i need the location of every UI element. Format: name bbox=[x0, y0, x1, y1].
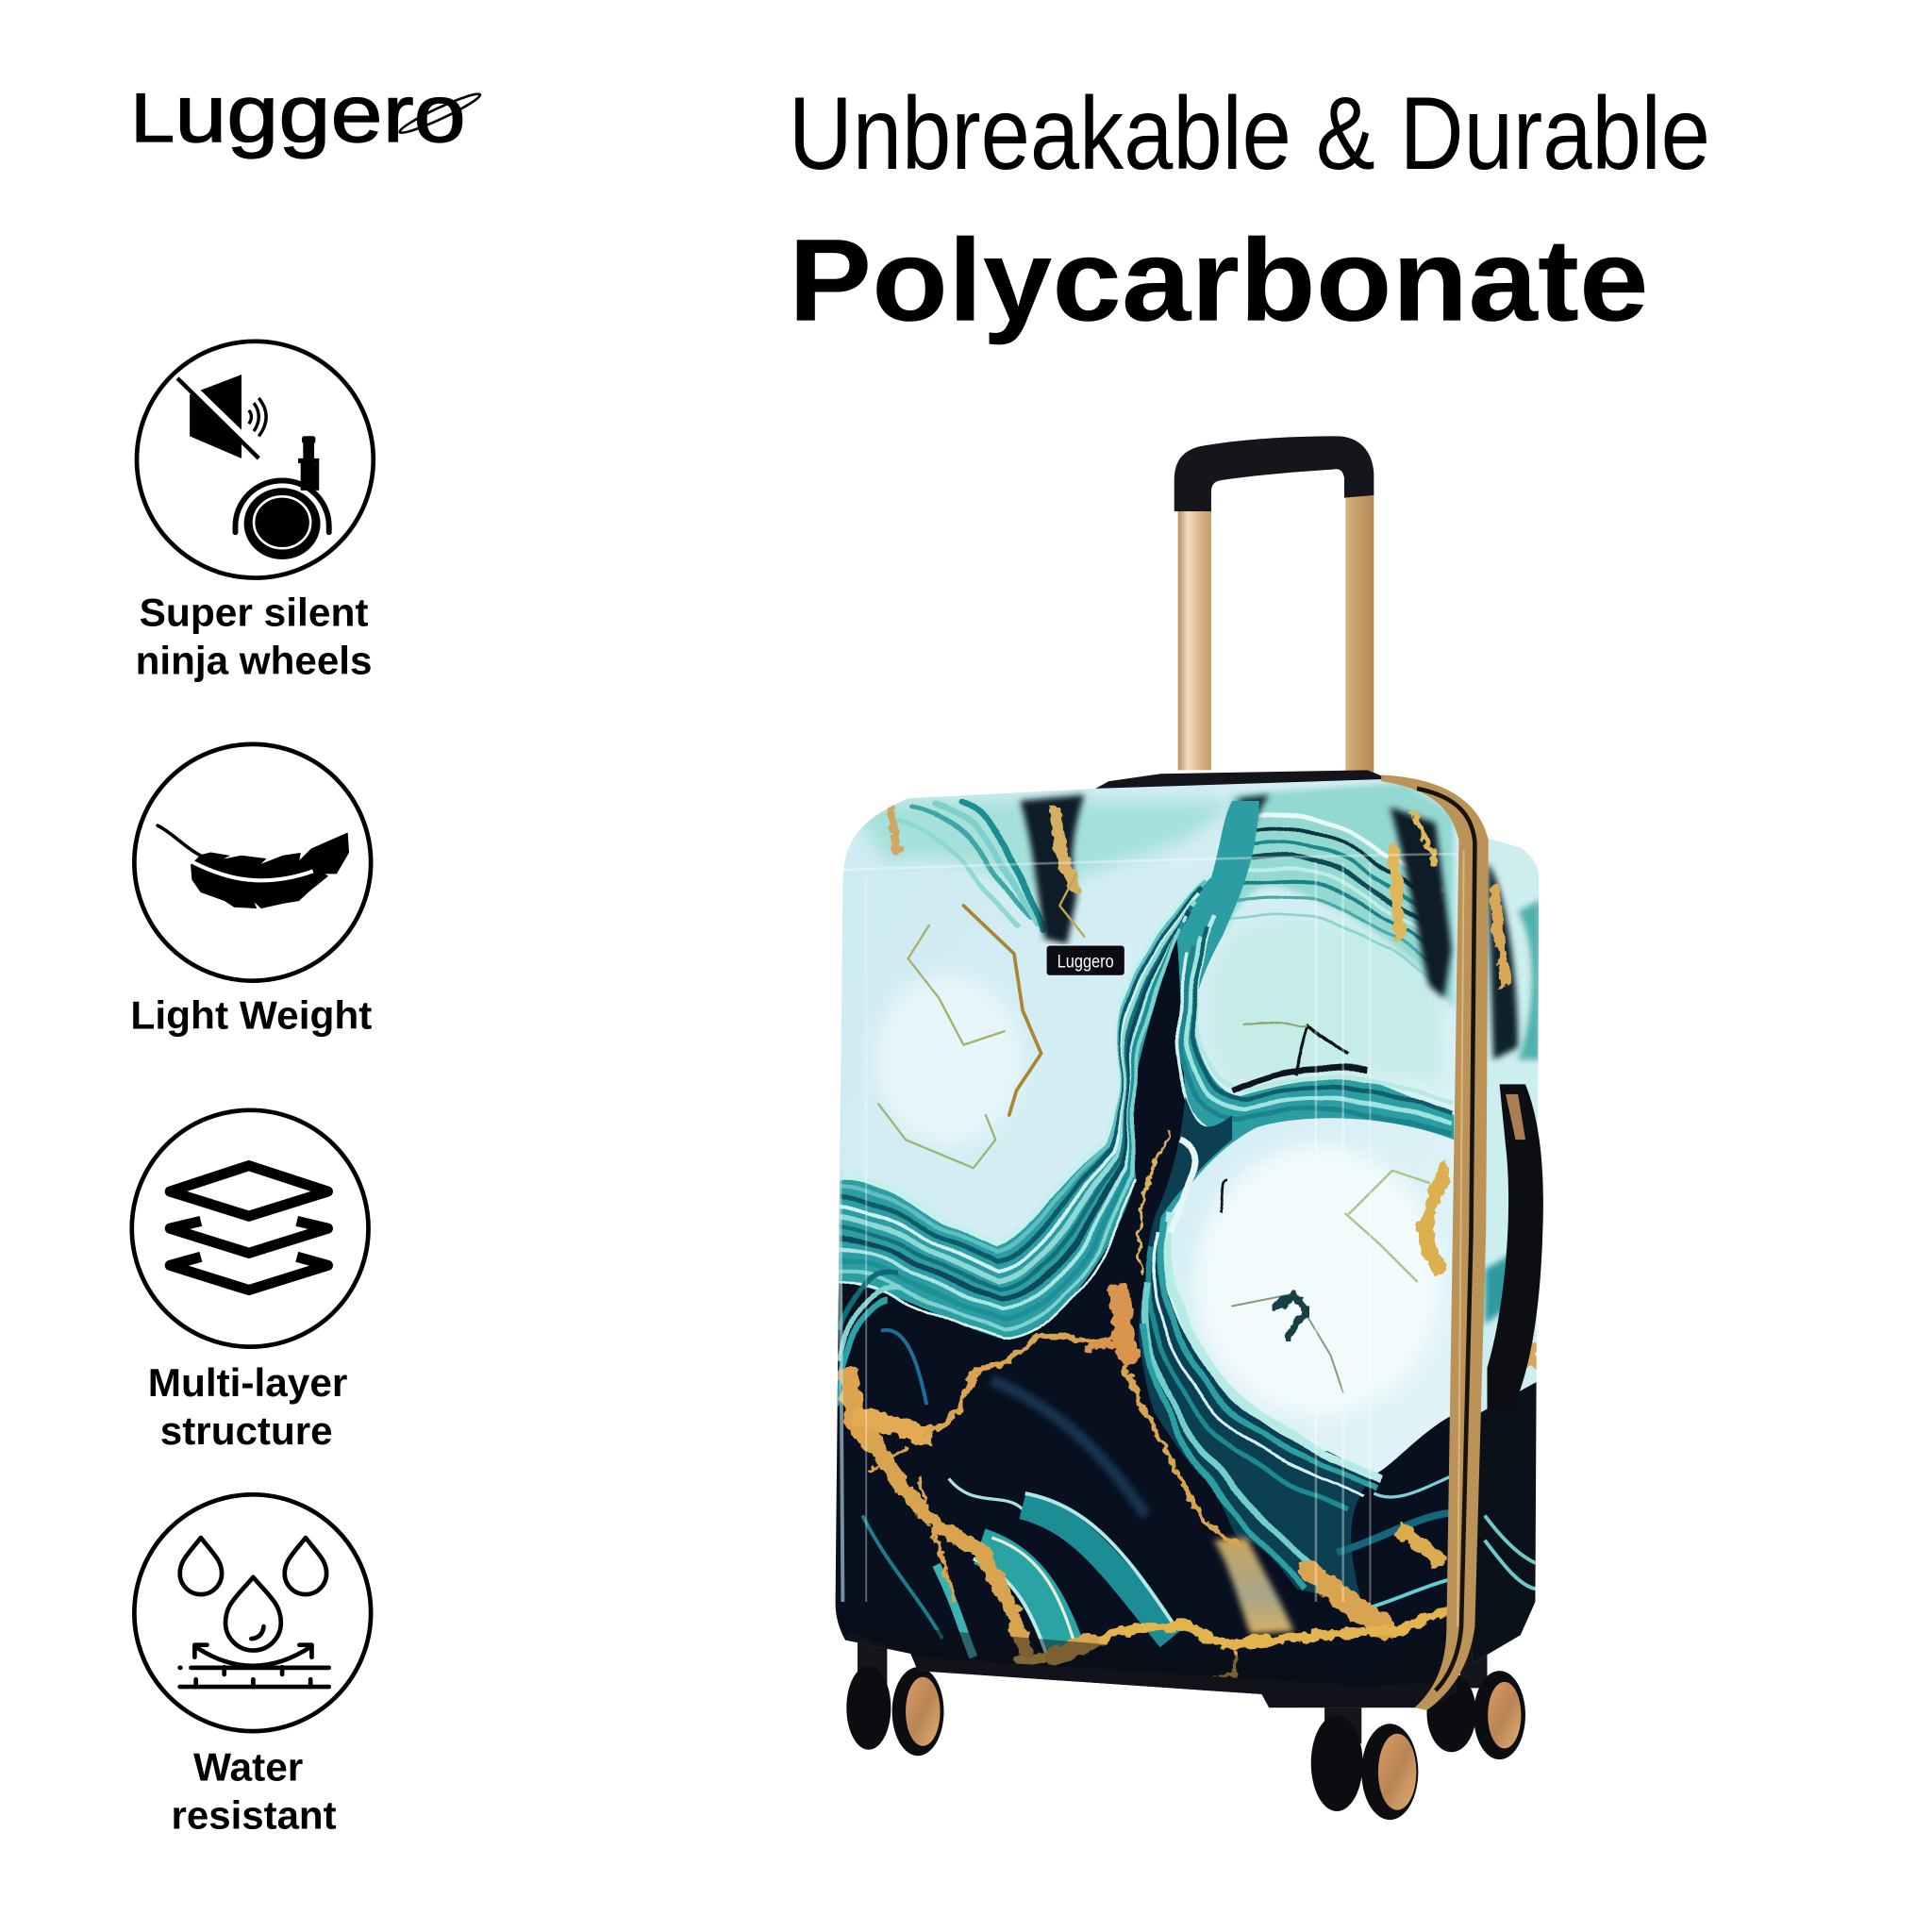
teal band along pale blob bbox=[1139, 1096, 1374, 1602]
title: Unbreakable & Durable bbox=[789, 76, 1710, 192]
label: Water bbox=[193, 1744, 303, 1789]
top collar bbox=[1095, 770, 1382, 794]
front-left wheel pair bbox=[846, 1633, 943, 1756]
label: Multi-layer bbox=[148, 1360, 347, 1405]
icon: layers bbox=[170, 1166, 327, 1291]
gold zipper band bbox=[1381, 775, 1489, 1710]
navy lower field bbox=[836, 937, 1473, 1719]
feature: multi-layer: structure bbox=[160, 1408, 333, 1453]
feature: water resistant bbox=[134, 1494, 371, 1837]
luggage badge bbox=[1046, 945, 1124, 975]
river stripes left band bbox=[836, 877, 1211, 1405]
front shell with marble print bbox=[825, 770, 1478, 1719]
left white glow bbox=[874, 974, 1023, 1146]
icon: feather bbox=[158, 825, 349, 908]
gloss ridges bbox=[842, 854, 1457, 1602]
logo planet ring bbox=[397, 90, 482, 137]
top-left teal contours bbox=[893, 801, 1041, 930]
gold veins bbox=[848, 804, 1452, 1687]
feature: multi-layer bbox=[132, 1110, 369, 1453]
feature: water resistant: resistant bbox=[172, 1792, 337, 1837]
fine veins on pale marble bbox=[878, 874, 1429, 1392]
icon: wheel bbox=[235, 436, 329, 559]
feature: silent wheels bbox=[136, 341, 374, 682]
side panel bbox=[1472, 838, 1540, 1663]
teal contour block top right bbox=[1223, 782, 1454, 1010]
lower navy streaks bbox=[862, 1330, 1460, 1663]
river stripes right of core bbox=[1177, 918, 1454, 1136]
teal river bbox=[836, 801, 1454, 1356]
luggage badge: Luggero bbox=[1058, 951, 1114, 972]
rear wheel pair bbox=[1426, 1626, 1525, 1759]
dark base moulding bbox=[836, 1611, 1457, 1707]
label: Super silent bbox=[140, 591, 369, 635]
icon: muted speaker bbox=[177, 375, 266, 458]
top navy patches bbox=[1020, 794, 1084, 943]
side carry handle bbox=[1487, 1084, 1543, 1412]
subtitle: Polycarbonate bbox=[789, 216, 1649, 346]
top band tint bbox=[850, 801, 1232, 899]
telescopic handle bbox=[1174, 436, 1374, 774]
feature: light weight bbox=[130, 744, 373, 1038]
icon: water drops bbox=[180, 1538, 329, 1687]
blob tint bbox=[1195, 1146, 1441, 1417]
suitcase bbox=[825, 436, 1546, 1820]
label: Light Weight bbox=[130, 993, 373, 1038]
front-right wheel pair bbox=[1311, 1694, 1418, 1820]
centre pale tint bbox=[1209, 918, 1441, 1084]
logo: Luggero: Luggero bbox=[130, 69, 466, 159]
title bbox=[789, 76, 1710, 346]
feature: silent wheels: ninja wheels bbox=[136, 638, 372, 682]
beige waterfall bbox=[1214, 1538, 1293, 1634]
